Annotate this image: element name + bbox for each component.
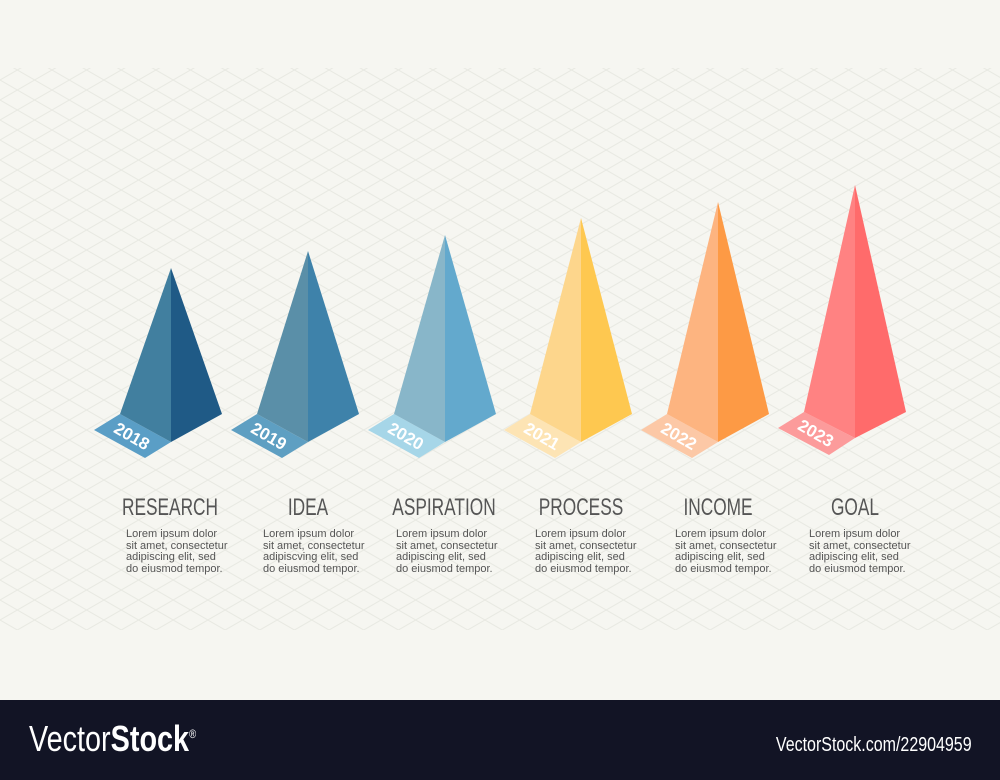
text: goal: [809, 528, 910, 575]
text: income: [675, 528, 776, 575]
text: research: adipiscing elit, sed: [126, 551, 216, 563]
pyramid 2021: [504, 218, 632, 458]
pyramid 2020: 2020: [385, 419, 427, 454]
text: research: sit amet, consectetur: [126, 540, 228, 552]
pyramid 2023: [778, 185, 906, 455]
text: research: [126, 528, 228, 575]
text: process: Lorem ipsum dolor: [535, 528, 626, 540]
pyramid 2021: 2021: [521, 419, 563, 454]
text: income: sit amet, consectetur: [675, 540, 776, 552]
text: goal: adipiscing elit, sed: [809, 551, 899, 563]
text: income: do eiusmod tempor.: [675, 563, 772, 575]
text: goal: sit amet, consectetur: [809, 540, 910, 552]
text: goal: Lorem ipsum dolor: [809, 528, 900, 540]
text: aspiration: Lorem ipsum dolor: [396, 528, 487, 540]
text: research: Lorem ipsum dolor: [126, 528, 217, 540]
pyramid 2019: [231, 251, 359, 458]
pyramid 2023: 2023: [795, 416, 837, 451]
label: RESEARCH: RESEARCH: [122, 494, 218, 521]
text: research: do eiusmod tempor.: [126, 563, 223, 575]
text: income: Lorem ipsum dolor: [675, 528, 766, 540]
pyramid 2022: [641, 202, 769, 458]
pyramid 2019: 2019: [248, 419, 290, 454]
text: idea: [263, 528, 364, 575]
text: aspiration: do eiusmod tempor.: [396, 563, 493, 575]
text: idea: Lorem ipsum dolor: [263, 528, 354, 540]
logo: VectorStock®: [29, 718, 196, 759]
pyramid 2018: [94, 268, 222, 458]
text: idea: adipiscving elit, sed: [263, 551, 358, 563]
text: process: adipiscing elit, sed: [535, 551, 625, 563]
label: IDEA: IDEA: [288, 494, 328, 521]
text: idea: sit amet, consectetur: [263, 540, 364, 552]
url: VectorStock.com/22904959: [776, 734, 972, 756]
text: aspiration: adipiscing elit, sed: [396, 551, 486, 563]
text: process: do eiusmod tempor.: [535, 563, 632, 575]
text: aspiration: sit amet, consectetur: [396, 540, 498, 552]
text: income: adipiscing elit, sed: [675, 551, 765, 563]
text: goal: do eiusmod tempor.: [809, 563, 906, 575]
label: PROCESS: PROCESS: [539, 494, 623, 521]
pyramid 2020: [368, 235, 496, 458]
footer bar: [0, 700, 1000, 780]
pyramid 2018: 2018: [111, 419, 153, 454]
label: ASPIRATION: ASPIRATION: [392, 494, 496, 521]
label: GOAL: GOAL: [831, 494, 879, 521]
text: idea: do eiusmod tempor.: [263, 563, 360, 575]
label: INCOME: INCOME: [683, 494, 753, 521]
text: process: sit amet, consectetur: [535, 540, 636, 552]
text: aspiration: [396, 528, 498, 575]
pyramid 2022: 2022: [658, 419, 700, 454]
text: process: [535, 528, 636, 575]
